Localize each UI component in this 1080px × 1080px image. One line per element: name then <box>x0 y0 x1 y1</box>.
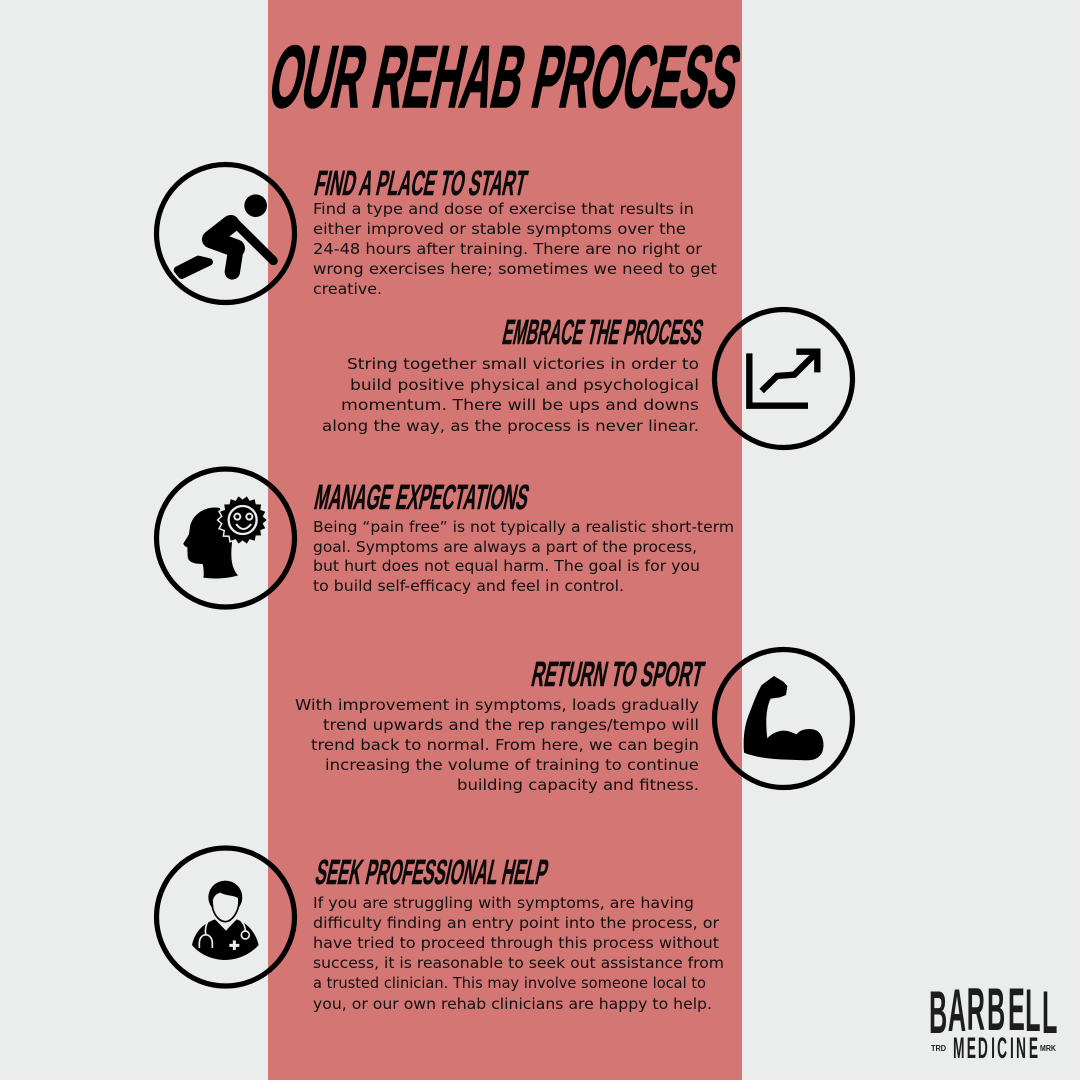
text block: step 3 body: to build self-efficacy and feel in control. <box>313 577 624 595</box>
text block: step 5 body: you, or our own rehab clinicians are happy to help. <box>313 995 712 1013</box>
heading: find a place to start: FIND A PLACE TO START <box>311 164 531 203</box>
step 2: embrace the process <box>322 313 707 435</box>
text block: step 5 body: difficulty finding an entry point into the process, or <box>313 914 720 932</box>
logo: barbell medicine: MRK <box>1040 1044 1056 1053</box>
text block: step 4 body: With improvement in symptoms, loads gradually <box>295 696 699 714</box>
text block: step 5 body <box>313 894 724 1013</box>
logo: barbell medicine: BARBELL <box>929 975 1057 1046</box>
text block: step 1 body <box>313 200 717 298</box>
text block: step 1 body: either improved or stable symptoms over the <box>313 220 686 238</box>
logo: barbell medicine: MEDICINE <box>953 1031 1038 1064</box>
icon: flexed bicep in circle <box>714 650 852 788</box>
text block: step 4 body: building capacity and fitness. <box>457 776 699 794</box>
text block: step 4 body <box>295 696 699 794</box>
text block: step 4 body: trend back to normal. From here, we can begin <box>311 736 699 754</box>
text block: step 2 body: momentum. There will be ups and downs <box>341 396 699 414</box>
text block: step 2 body: build positive physical and psychological <box>350 376 699 394</box>
icon: runner in circle <box>156 164 294 302</box>
text block: step 1 body: wrong exercises here; sometimes we need to get <box>313 260 717 278</box>
heading: return to sport: RETURN TO SPORT <box>528 655 708 694</box>
text block: step 1 body: Find a type and dose of exercise that results in <box>313 200 694 218</box>
icon: head with happy sun in circle <box>156 469 294 607</box>
logo: barbell medicine: TRD <box>931 1044 946 1053</box>
text block: step 3 body <box>313 518 734 595</box>
text block: step 3 body: goal. Symptoms are always a part of the process, <box>313 538 697 556</box>
text block: step 2 body: String together small victories in order to <box>347 355 699 373</box>
step 5: seek professional help: SEEK PROFESSIONAL HELP <box>312 853 552 892</box>
text block: step 3 body: but hurt does not equal harm. The goal is for you <box>313 557 700 575</box>
text block: step 5 body: success, it is reasonable to seek out assistance from <box>313 954 724 972</box>
step 1: find a place to start <box>311 164 717 298</box>
step 3: manage expectations <box>311 478 734 595</box>
text: EMBRACE THE PROCESS <box>499 313 707 352</box>
text block: step 5 body: have tried to proceed through this process without <box>313 934 719 952</box>
text block: step 5 body: If you are struggling with symptoms, are having <box>313 894 694 912</box>
text block: step 5 body: a trusted clinician. This may involve someone local to <box>313 974 706 992</box>
text block: step 2 body: along the way, as the process is never linear. <box>322 417 699 435</box>
text block: step 4 body: trend upwards and the rep ranges/tempo will <box>323 716 699 734</box>
text block: step 3 body: Being “pain free” is not typically a realistic short-term <box>313 518 734 536</box>
text block: step 1 body: 24-48 hours after training. There are no right or <box>313 240 703 258</box>
heading: manage expectations: MANAGE EXPECTATIONS <box>311 478 533 517</box>
step 5: seek professional help <box>312 853 724 1013</box>
text block: step 2 body <box>322 355 699 435</box>
text block: step 4 body: increasing the volume of training to continue <box>325 756 699 774</box>
icon: doctor in circle <box>156 848 294 986</box>
center panel <box>268 0 742 1080</box>
step 4: return to sport <box>295 655 708 794</box>
icon: growth chart in circle <box>714 310 852 448</box>
text block: step 1 body: creative. <box>313 280 382 298</box>
